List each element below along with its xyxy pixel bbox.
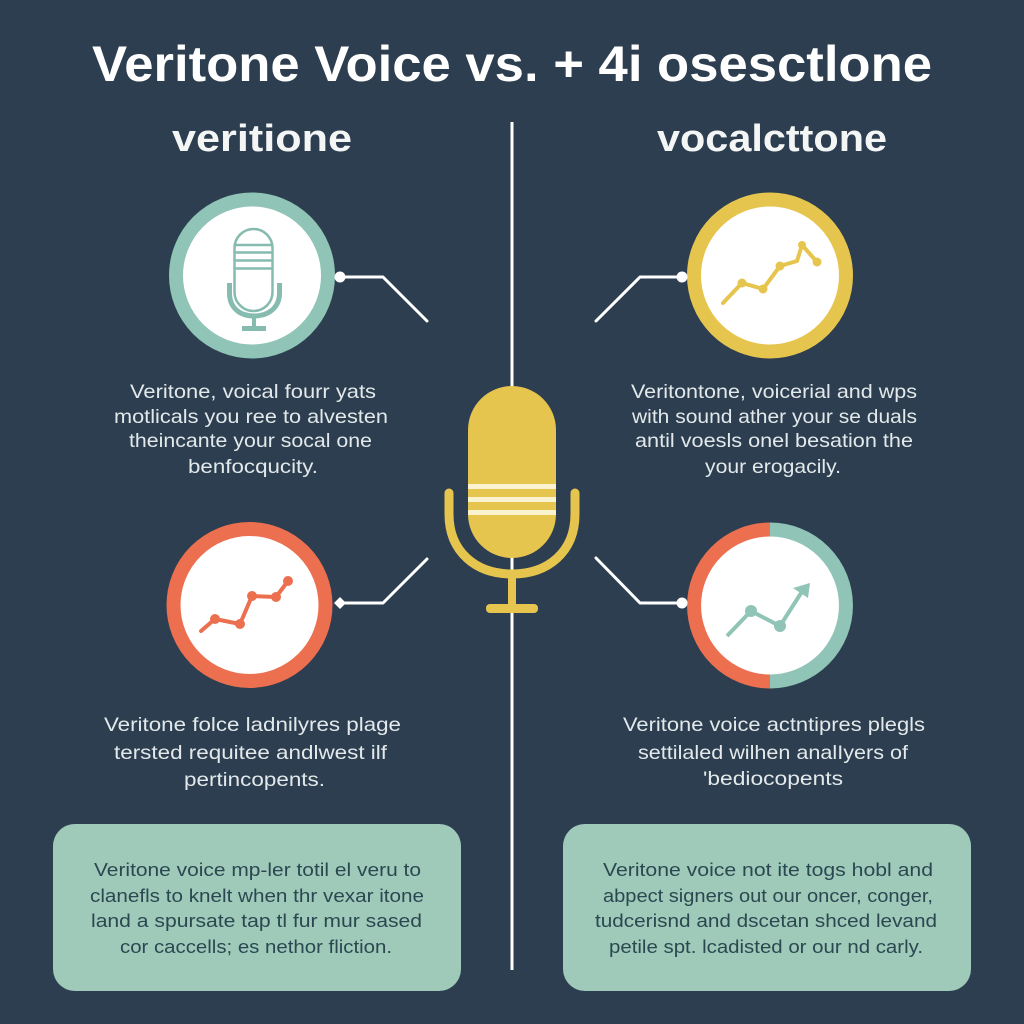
text: upper left description: motlicals you ree to alvesten — [114, 406, 388, 428]
title: Veritone Voice vs. + 4i osesctlone — [92, 36, 932, 92]
text: lower right description: 'bediocopents — [703, 768, 843, 790]
text: lower left description: Veritone folce ladnilyres plage — [104, 714, 401, 736]
text: upper right description: with sound ather your se duals — [631, 406, 917, 428]
icon: yellow line chart circle with connector — [596, 200, 846, 352]
text: upper right description: your erogacily. — [705, 456, 841, 478]
icon: red line chart circle with connector — [174, 529, 427, 681]
text: upper right description — [631, 381, 917, 478]
panel: right callout: abpect signers out our oncer, conger, — [603, 885, 933, 906]
left heading: veritione — [172, 118, 352, 160]
panel: right callout: tudcerisnd and dscetan shced levand — [595, 910, 937, 931]
panel: right callout: Veritone voice not ite togs hobl and — [603, 859, 933, 880]
panel: left callout: clanefls to knelt when thr vexar itone — [90, 885, 424, 906]
panel: left callout: cor caccells; es nethor fliction. — [120, 936, 392, 957]
panel: left callout — [53, 824, 461, 991]
central divider line — [510, 122, 514, 970]
text: upper right description: Veritontone, voicerial and wps — [631, 381, 917, 403]
text: lower left description: tersted requitee andlwest ilf — [114, 742, 388, 764]
text: upper right description: antil voesls onel besation the — [635, 430, 913, 452]
text: upper left description: Veritone, voical fourr yats — [130, 381, 376, 403]
text: lower left description — [104, 714, 401, 791]
panel: left callout: Veritone voice mp-ler totil el veru to — [94, 859, 421, 880]
icon: microphone circle with connector — [176, 200, 427, 352]
text: lower right description — [623, 714, 925, 790]
panel: right callout — [563, 824, 971, 991]
icon: split circle with arrow chart and connector — [596, 530, 846, 682]
icon: central microphone — [449, 386, 575, 613]
right heading: vocalcttone — [657, 118, 887, 160]
text: lower right description: Veritone voice actntipres plegls — [623, 714, 925, 736]
text: lower right description: settilaled wilhen analIyers of — [638, 742, 909, 764]
text: upper left description — [114, 381, 388, 478]
panel: right callout: petile spt. lcadisted or our nd carly. — [609, 936, 923, 957]
text: upper left description: benfocqucity. — [188, 456, 318, 478]
text: upper left description: theincante your socal one — [129, 430, 372, 452]
panel: left callout: land a spursate tap tl fur mur sased — [91, 910, 422, 931]
text: lower left description: pertincopents. — [184, 769, 325, 791]
